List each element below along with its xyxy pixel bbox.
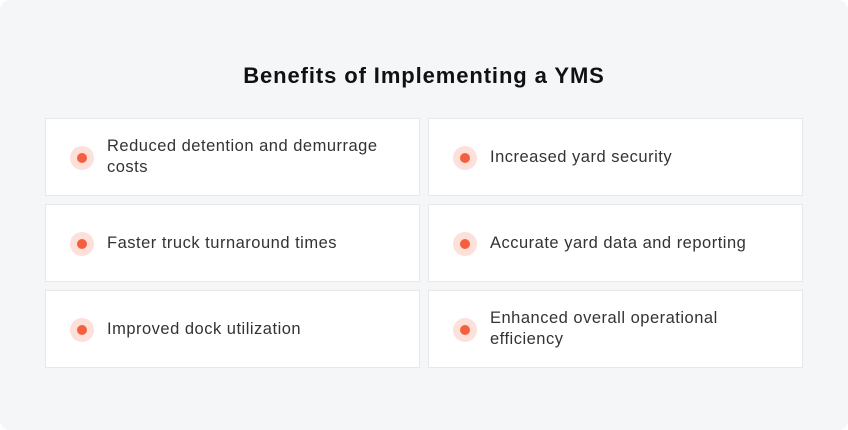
card: operational efficiency (428, 290, 803, 368)
card: reduced detention: costs (107, 158, 148, 176)
card: truck turnaround (45, 204, 420, 282)
title: Benefits of Implementing a YMS (243, 63, 605, 88)
card: reduced detention (45, 118, 420, 196)
card: yard security (428, 118, 803, 196)
card: yard data (428, 204, 803, 282)
card: dock utilization (45, 290, 420, 368)
card: operational efficiency: efficiency (490, 330, 563, 348)
card: yard security: Increased yard security (490, 148, 672, 166)
card: truck turnaround: Faster truck turnaround times (107, 234, 337, 252)
card: yard data: Accurate yard data and reporting (490, 234, 746, 252)
card: operational efficiency: Enhanced overall operational (490, 309, 718, 327)
card: dock utilization: Improved dock utilization (107, 320, 301, 338)
card: reduced detention: Reduced detention and demurrage (107, 137, 378, 155)
